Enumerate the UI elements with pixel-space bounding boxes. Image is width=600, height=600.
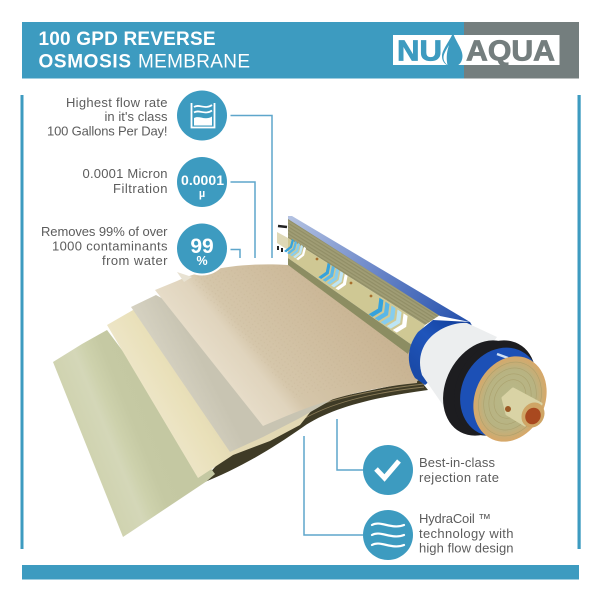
feature: HydraCoil (363, 510, 514, 560)
feature: removes 99 percent (41, 222, 229, 276)
cylinder: blue strip (288, 216, 470, 322)
title: OSMOSIS (38, 52, 131, 72)
left border bar (20, 95, 24, 549)
blue inner sleeve (445, 334, 555, 450)
cylinder: lower band (288, 258, 412, 354)
icon: 99 percent badge: % (196, 254, 208, 268)
feature text: from water (102, 253, 168, 268)
icon: 99 percent badge: 99 (190, 235, 214, 258)
icon: check mark (363, 445, 413, 495)
feature text: 1000 contaminants (52, 238, 168, 254)
feature text: HydraCoil ™ (419, 511, 491, 526)
feature: micron filtration (82, 157, 227, 207)
sheet: tan top (155, 264, 420, 426)
leader line: 99 percent (230, 250, 240, 258)
membrane sheets (53, 264, 428, 537)
black gasket (427, 326, 552, 450)
title: MEMBRANE (138, 52, 250, 72)
sheet: tan mesh texture (190, 265, 420, 398)
water flow chevrons (284, 239, 412, 335)
sleeve highlight (497, 354, 508, 358)
membrane cylinder (277, 216, 560, 453)
logo: Nu Aqua (393, 33, 560, 68)
leader line: flow rate (230, 116, 272, 258)
cylinder: upper mesh (288, 218, 440, 325)
title (38, 29, 250, 72)
bottom bar (22, 565, 579, 580)
feature text: 0.0001 Micron (82, 166, 168, 181)
icon: flow vessel (177, 90, 227, 140)
feature text: 100 Gallons Per Day! (47, 124, 168, 138)
icon: 0.0001 micron badge (177, 157, 227, 207)
feature text (419, 455, 499, 485)
feature text (419, 511, 514, 556)
pale sheet corner (177, 272, 192, 282)
feature text (82, 166, 168, 196)
feature text (47, 95, 168, 138)
logo: Nu Aqua: AQUA (466, 36, 555, 68)
white band (420, 323, 497, 408)
feature: rejection rate (363, 445, 499, 495)
feature text: Highest flow rate (66, 95, 168, 110)
icon: 0.0001 micron badge: µ (199, 188, 205, 200)
feature: highest flow rate (47, 90, 227, 140)
leader line: micron (230, 182, 255, 258)
feature text: Filtration (113, 181, 168, 196)
feature text: high flow design (419, 540, 514, 556)
end disc (460, 345, 560, 453)
feature text: rejection rate (419, 470, 499, 485)
sheet: green (53, 330, 215, 537)
cylinder: brown holes (316, 258, 372, 297)
sheet: gray (131, 295, 340, 452)
right border bar (578, 95, 581, 549)
backing layers: dark edges (200, 380, 428, 484)
feature text: in it's class (104, 109, 168, 124)
header banner (22, 22, 579, 78)
end stem (503, 389, 549, 432)
sheet: cream (107, 310, 320, 478)
feature text (41, 224, 168, 268)
title: 100 GPD REVERSE (38, 29, 216, 50)
fitting at tube end (277, 226, 288, 252)
feature text: technology with (419, 526, 514, 541)
icon: waves (363, 510, 413, 560)
feature text: Removes 99% of over (41, 224, 168, 239)
leader line: rejection rate (337, 419, 363, 470)
leader line: HydraCoil (304, 436, 363, 535)
icon: 99 percent badge (175, 222, 229, 276)
icon: 0.0001 micron badge: 0.0001 (181, 172, 224, 188)
logo: Nu Aqua: NU (397, 36, 442, 68)
blue collar (409, 320, 480, 385)
feature text: Best-in-class (419, 455, 496, 470)
cylinder: inner channel (288, 238, 425, 345)
